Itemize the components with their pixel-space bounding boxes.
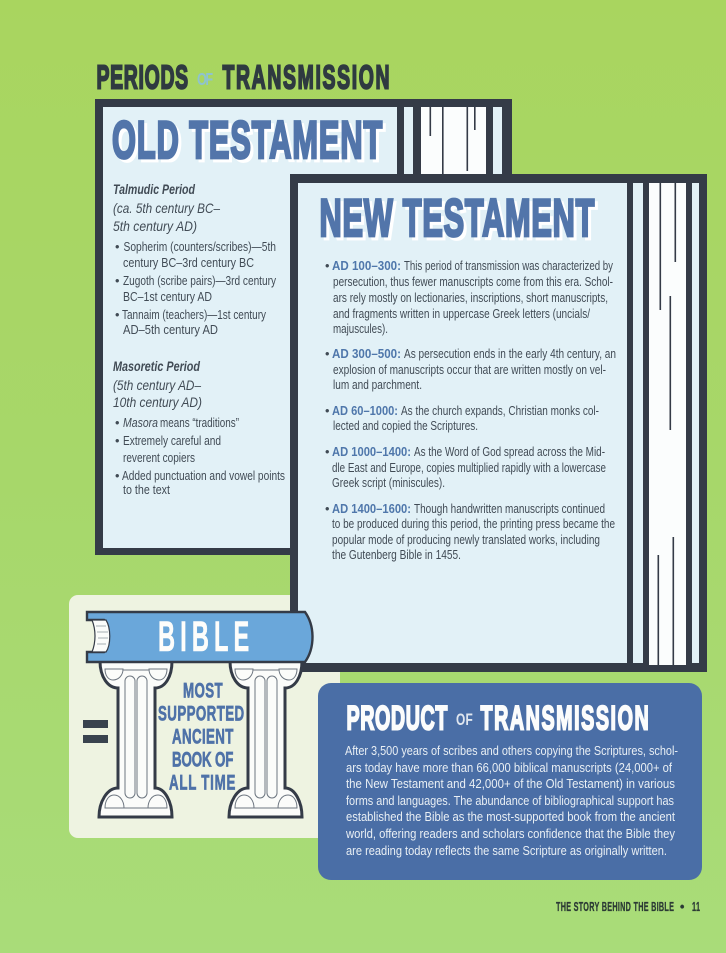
text block: masoretic period: reverent copiers [123, 450, 195, 465]
text block: AD 1000-1400: • [325, 444, 329, 459]
text block: AD 1000-1400: Greek script (miniscules). [332, 475, 445, 490]
text block: AD 1400-1600: • [325, 501, 329, 516]
text block: masoretic period: Extremely careful and [123, 433, 221, 448]
text block: AD 100-300: majuscules). [333, 321, 388, 336]
text block: AD 1000-1400 [325, 444, 606, 490]
panel: bible background [69, 595, 340, 838]
text block: AD 60-1000: • [325, 403, 329, 418]
text block: AD 300-500: • [325, 346, 329, 361]
heading: old testament: OLD TESTAMENT [115, 115, 385, 173]
text block: masoretic period: 10th century AD) [113, 394, 202, 410]
text block: product body: the New Testament and 42,000+ of the Old Testament) in various [346, 776, 675, 791]
text block: talmudic period: • [115, 273, 119, 288]
text block: product body: are reading today reflects the same Scripture as originally written. [346, 843, 667, 858]
text block: talmudic period: century BC–3rd century BC [123, 255, 254, 270]
text block: talmudic period: Zugoth (scribe pairs)—3rd century [123, 273, 276, 288]
text block: most supported ancient book: MOST [183, 678, 223, 702]
text block: AD 60-1000: lected and copied the Scriptures. [333, 418, 478, 433]
text block: masoretic period: • [115, 415, 119, 430]
text block: talmudic period: • [115, 307, 119, 322]
text block: talmudic period: (ca. 5th century BC– [113, 200, 220, 216]
heading: new testament: NEW TESTAMENT [322, 193, 597, 251]
text block: talmudic period: • [115, 239, 119, 254]
text block: AD 1400-1600 [325, 501, 615, 562]
text block: AD 1000-1400: AD 1000–1400: [332, 444, 411, 459]
heading: product of transmission: PRODUCT [346, 699, 447, 737]
text block: masoretic period: • [115, 468, 119, 483]
text block: AD 300-500: AD 300–500: [332, 346, 401, 361]
text block: AD 1400-1600: popular mode of producing newly translated works, including [332, 532, 600, 547]
text block: AD 1000-1400: dle East and Europe, copies multiplied rapidly with a lowercase [332, 460, 606, 475]
footer: 11 [692, 901, 700, 915]
text block: masoretic period: to the text [123, 482, 170, 497]
text block: most supported ancient book [158, 678, 244, 794]
text block: AD 100-300: ars rely mostly on lectionaries, inscriptions, short manuscripts, [333, 290, 608, 305]
text block: product body: world, offering readers and scholars confidence that the Bible they [345, 826, 675, 841]
text block: AD 100-300: • [325, 258, 329, 273]
text block: masoretic period: Added punctuation and vowel points [122, 468, 285, 483]
text block: masoretic period [113, 358, 285, 497]
text block: talmudic period: 5th century AD) [113, 218, 197, 234]
icon: book [87, 612, 312, 662]
panel: product of transmission [318, 683, 702, 880]
text block: product body: established the Bible as the most-supported book from the ancient [346, 809, 675, 824]
text block: AD 100-300: and fragments written in uppercase Greek letters (uncials/ [333, 306, 590, 321]
text block: AD 300-500: lum and parchment. [333, 377, 422, 392]
text block: talmudic period [113, 181, 276, 337]
text block: most supported ancient book: ALL TIME [169, 770, 235, 794]
footer: • [680, 900, 684, 914]
text block: masoretic period: Masoretic Period [113, 358, 200, 374]
title: PERIODS [96, 58, 188, 96]
text block: talmudic period: Sopherim (counters/scribes)—5th [124, 239, 276, 254]
title: OF [197, 70, 213, 90]
text block: talmudic period: Talmudic Period [113, 181, 195, 197]
text block: AD 300-500 [325, 346, 616, 392]
heading: product of transmission [346, 699, 649, 737]
footer: THE STORY BEHIND THE BIBLE [556, 901, 674, 915]
title [96, 58, 390, 96]
heading: product of transmission: OF [456, 711, 473, 730]
icon: left pillar [99, 661, 172, 817]
text block: AD 300-500: explosion of manuscripts occur that are written mostly on vel- [333, 362, 606, 377]
text block: AD 1400-1600: Though handwritten manuscripts continued [414, 501, 605, 516]
icon: equals sign [83, 720, 108, 743]
text block: talmudic period: BC–1st century AD [123, 289, 212, 304]
text block: most supported ancient book: SUPPORTED [158, 701, 244, 725]
text block: talmudic period: AD–5th century AD [123, 322, 218, 337]
text block: AD 60-1000 [325, 403, 599, 433]
text block: AD 300-500: As persecution ends in the early 4th century, an [404, 346, 616, 361]
text block: most supported ancient book: BOOK OF [172, 747, 233, 771]
title: TRANSMISSION [222, 58, 390, 96]
text block: masoretic period: means “traditions” [160, 415, 239, 430]
book title: BIBLE [158, 614, 249, 661]
text block: AD 100-300: AD 100–300: [332, 258, 401, 273]
text block: AD 60-1000: As the church expands, Christian monks col- [401, 403, 599, 418]
heading: old testament: OLD TESTAMENT [112, 112, 382, 170]
text block: AD 1400-1600: to be produced during this period, the printing press became the [332, 516, 615, 531]
text block: AD 100-300: This period of transmission was characterized by [404, 258, 613, 273]
text block: talmudic period: Tannaim (teachers)—1st century [122, 307, 266, 322]
heading: new testament: NEW TESTAMENT [320, 190, 594, 248]
text block: masoretic period: • [115, 433, 119, 448]
text block: masoretic period: Masora [123, 415, 158, 430]
panel: old testament [95, 99, 512, 555]
text block: masoretic period: (5th century AD– [113, 377, 201, 393]
text block: AD 1000-1400: As the Word of God spread across the Mid- [414, 444, 605, 459]
text block: AD 1400-1600: AD 1400–1600: [332, 501, 411, 516]
text block: product body: ars today have more than 66,000 biblical manuscripts (24,000+ of [346, 760, 672, 775]
text block: most supported ancient book: ANCIENT [172, 724, 233, 748]
text block: AD 60-1000: AD 60–1000: [332, 403, 398, 418]
panel: new testament [290, 174, 707, 672]
text block: product body [345, 743, 678, 858]
icon: right pillar [229, 661, 302, 817]
text block: AD 100-300 [325, 258, 613, 336]
heading: product of transmission: TRANSMISSION [480, 699, 649, 737]
text block: AD 100-300: persecution, thus fewer manuscripts come from this era. Schol- [333, 274, 613, 289]
text block: AD 1400-1600: the Gutenberg Bible in 1455. [332, 547, 461, 562]
panel: bible pillars graphic [83, 612, 312, 817]
